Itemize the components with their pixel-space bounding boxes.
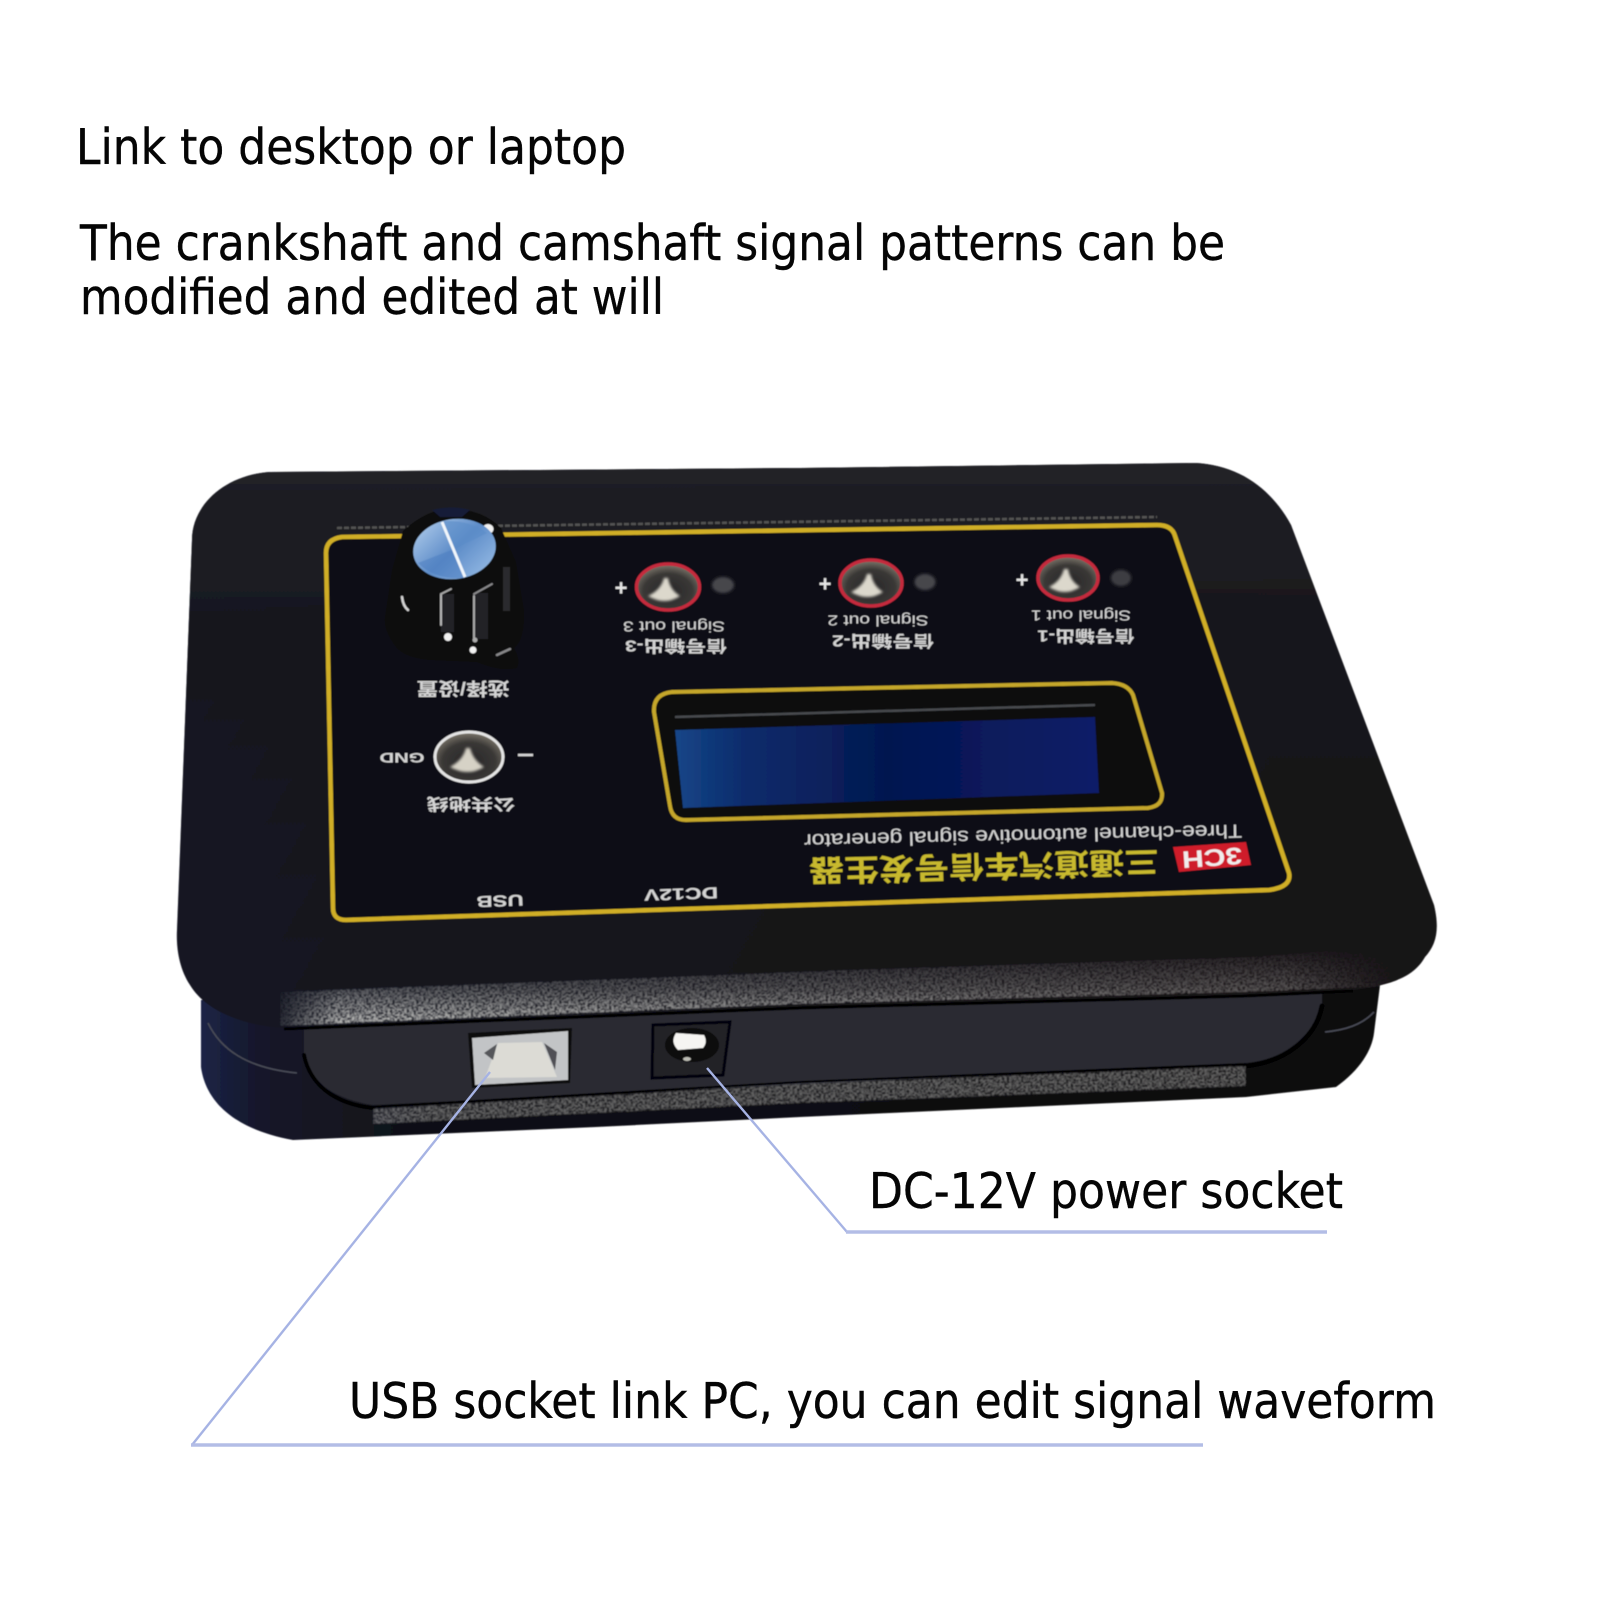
socket label: signal out 2: Signal out 2	[828, 612, 928, 628]
knob label: 选择/设置	[416, 678, 510, 698]
front panel	[326, 525, 1289, 920]
socket: signal out 2: +	[819, 572, 831, 596]
3CH badge: 3CH	[1181, 841, 1243, 873]
ground label: 公共地线	[426, 794, 516, 814]
text block: signal patterns editable: The crankshaft and camshaft signal patterns can be	[79, 215, 1225, 272]
infographic canvas	[80, 126, 1438, 1447]
shell seams	[208, 1012, 1374, 1073]
callout leader: DC socket	[707, 1068, 1327, 1232]
side recess panel	[304, 985, 1322, 1105]
socket label: signal out 2: 信号输出-2	[832, 632, 934, 650]
USB port	[468, 1028, 572, 1088]
knob flutes	[402, 567, 510, 655]
device: signal generator	[177, 463, 1437, 1140]
LCD screen	[675, 717, 1099, 808]
socket: signal out 1	[1016, 556, 1131, 600]
socket: signal out 2	[819, 560, 936, 606]
speckled lower band	[373, 1066, 1246, 1124]
3CH badge	[1173, 841, 1251, 873]
LCD top edge	[675, 705, 1095, 717]
panel top glint	[337, 517, 1157, 528]
speckled highlight band on shell edge	[280, 954, 1393, 1026]
callout leader: USB socket	[191, 1072, 1203, 1445]
recess shadow curves	[304, 1006, 1322, 1108]
knob	[385, 508, 524, 669]
shell underside edge	[284, 991, 1353, 1029]
socket label: signal out 1	[1031, 606, 1134, 646]
knob metal cap	[409, 508, 500, 584]
socket: signal out 1: +	[1016, 568, 1028, 592]
panel label: DC12V: DC12V	[643, 883, 718, 903]
text block: signal patterns editable: modified and edited at will	[80, 269, 664, 326]
socket: ground	[380, 732, 533, 782]
DC power port	[652, 1022, 730, 1078]
socket label: signal out 3: 信号输出-3	[625, 636, 727, 656]
top shell	[177, 463, 1437, 1028]
panel title English: Three-channel automotive signal generator	[803, 820, 1242, 850]
socket: signal out 3	[615, 564, 734, 610]
device lower shell	[201, 985, 1380, 1140]
socket label: signal out 1: Signal out 1	[1031, 606, 1131, 624]
socket label: signal out 2	[828, 612, 934, 650]
socket label: signal out 3	[623, 618, 727, 656]
socket label: signal out 3: Signal out 3	[623, 618, 725, 634]
knob glints	[444, 524, 494, 654]
callout text: USB socket: USB socket link PC, you can edit signal waveform	[349, 1373, 1436, 1430]
socket label: signal out 1: 信号输出-1	[1037, 626, 1134, 646]
panel label: USB: USB	[476, 891, 524, 909]
callout text: DC socket: DC-12V power socket	[869, 1163, 1343, 1220]
knob body	[385, 509, 524, 669]
socket: ground: GND	[380, 750, 424, 766]
socket: signal out 3: +	[615, 576, 627, 600]
heading: link to desktop or laptop: Link to desktop or laptop	[76, 119, 626, 176]
display bezel	[654, 683, 1162, 820]
panel title Chinese: 三通道汽车信号发生器	[809, 844, 1159, 886]
text block: signal patterns editable	[79, 215, 1225, 326]
